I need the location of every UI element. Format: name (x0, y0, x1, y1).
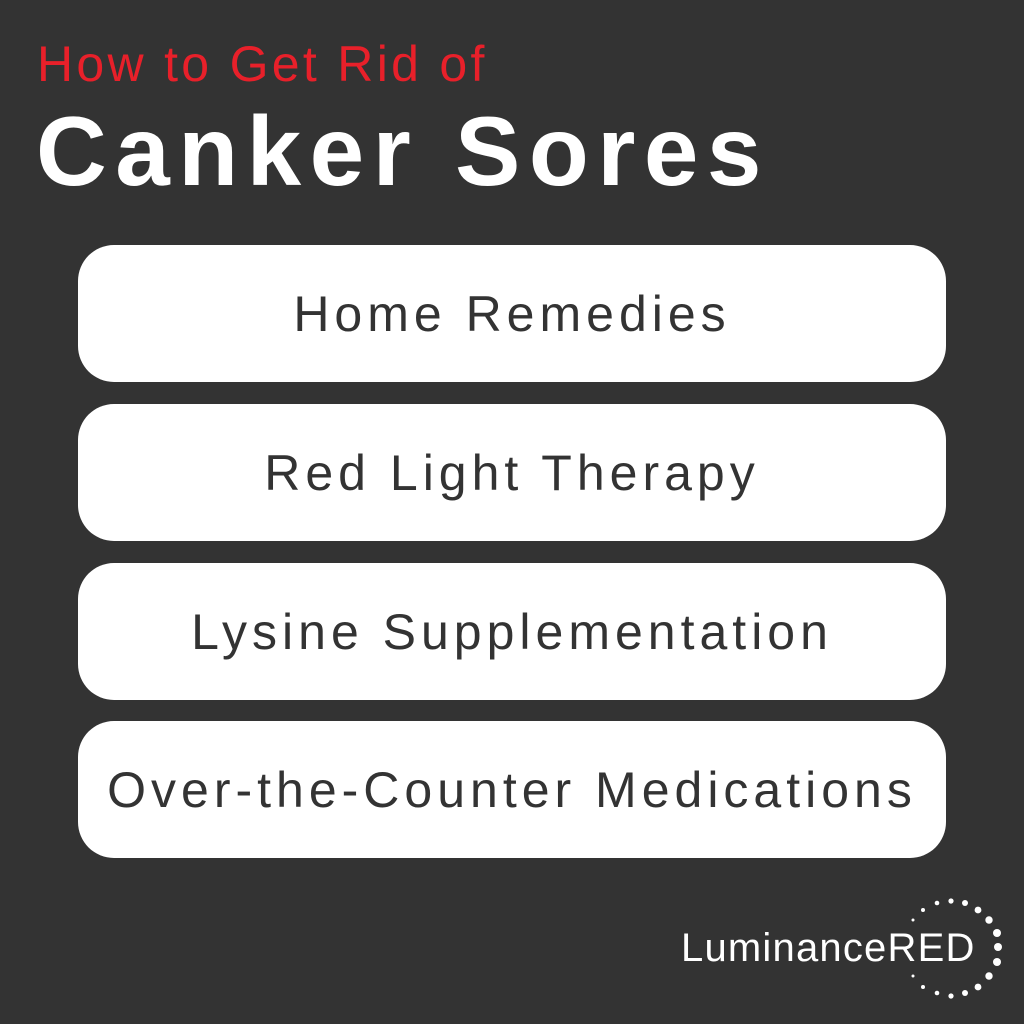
title: main: Canker Sores (36, 96, 770, 206)
title: subtitle: How to Get Rid of (37, 36, 488, 92)
item: red light therapy: Red Light Therapy (264, 444, 760, 500)
item: lysine (78, 563, 946, 700)
item: OTC (78, 721, 946, 858)
icon: logo dot arc (912, 898, 1002, 999)
item: lysine: Lysine Supplementation (191, 604, 833, 660)
item: red light therapy (78, 404, 946, 541)
item: OTC: Over-the-Counter Medications (107, 762, 917, 818)
item: home remedies (78, 245, 946, 382)
item: home remedies: Home Remedies (293, 286, 731, 342)
logo text: LuminanceRED (681, 926, 976, 970)
